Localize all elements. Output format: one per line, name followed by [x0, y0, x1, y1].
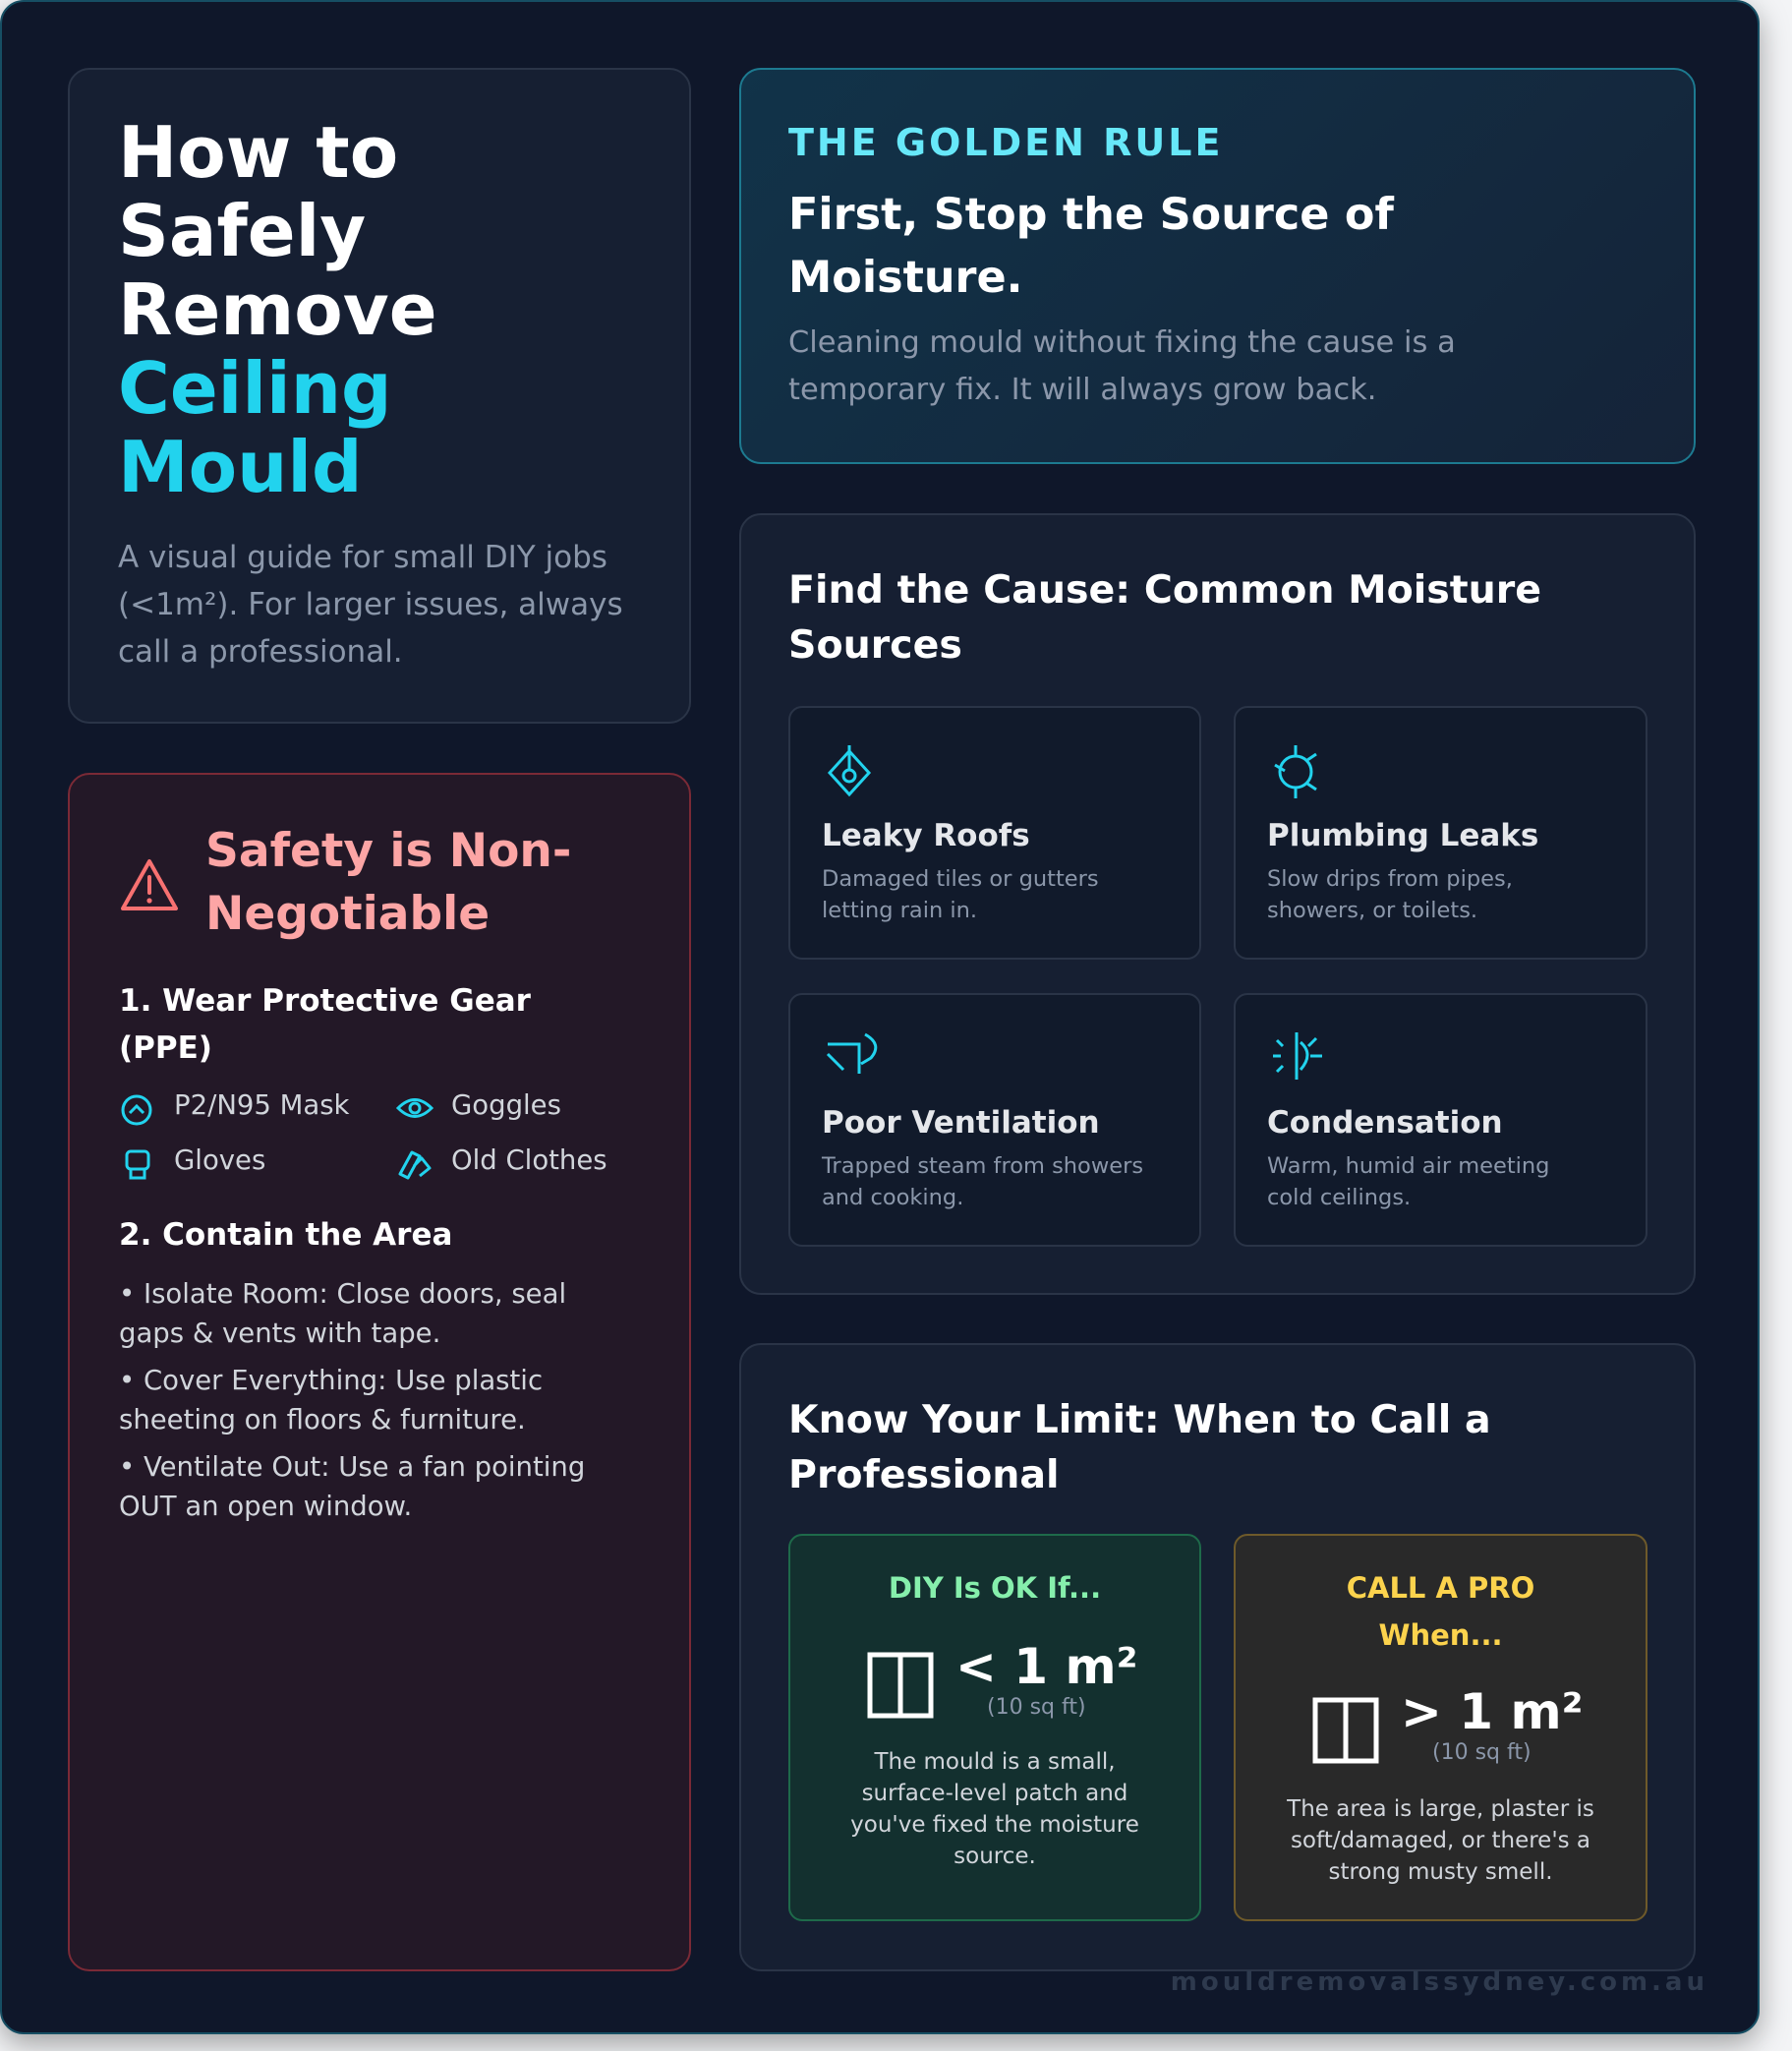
box: call a pro: The area is large, plaster is [1287, 1796, 1594, 1822]
step 2 bullets: • Isolate Room: Close doors, seal [119, 1278, 566, 1310]
card: plumbing [1234, 706, 1647, 960]
heading: Professional [788, 1452, 1060, 1497]
title: Ceiling [118, 347, 392, 430]
step 2 bullets: • Cover Everything: Use plastic [119, 1365, 543, 1396]
box: call a pro: soft/damaged, or there's a [1291, 1828, 1590, 1853]
heading: Find the Cause: Common Moisture [788, 567, 1541, 613]
heading: safety: Safety is Non- [205, 824, 571, 878]
subtitle: (<1m²). For larger issues, always [118, 587, 623, 622]
subtitle: call a professional. [118, 634, 403, 670]
step 1 heading: 1. Wear Protective Gear [119, 983, 531, 1019]
title [118, 111, 437, 508]
card: plumbing: showers, or toilets. [1267, 898, 1477, 923]
heading: safety: Negotiable [205, 887, 490, 941]
icon: ventilation [827, 1032, 877, 1074]
subtitle: A visual guide for small DIY jobs [118, 540, 607, 575]
box: call a pro: CALL A PRO [1347, 1571, 1534, 1605]
box: DIY ok [788, 1534, 1201, 1921]
card: condensation: cold ceilings. [1267, 1185, 1411, 1210]
step 2 heading: 2. Contain the Area [119, 1217, 452, 1253]
icon: mask [122, 1095, 151, 1125]
box: DIY ok: < 1 m² [955, 1638, 1138, 1695]
step 1 heading: (PPE) [119, 1030, 212, 1066]
step 2 bullets: • Ventilate Out: Use a fan pointing [119, 1451, 585, 1483]
icon: roof leak [828, 745, 871, 796]
footer url: mouldremovalssydney.com.au [1171, 1967, 1708, 1997]
step 2 bullets: sheeting on floors & furniture. [119, 1404, 526, 1436]
card: leaky roofs [788, 706, 1201, 960]
icon: plumbing [1274, 745, 1317, 798]
heading [788, 567, 1541, 668]
box: DIY ok: DIY Is OK If... [889, 1571, 1101, 1605]
heading: Sources [788, 622, 962, 668]
heading: Know Your Limit: When to Call a [788, 1397, 1491, 1442]
label: THE GOLDEN RULE [788, 121, 1223, 164]
card: plumbing: Plumbing Leaks [1267, 818, 1538, 853]
box: call a pro: > 1 m² [1401, 1683, 1583, 1740]
box: DIY ok: surface-level patch and [862, 1781, 1127, 1806]
panel: causes [739, 513, 1696, 1295]
body [788, 325, 1456, 407]
step 2 bullets [119, 1278, 585, 1522]
subtitle [118, 540, 623, 670]
card: condensation: Condensation [1267, 1105, 1503, 1141]
title: Remove [118, 268, 437, 351]
PPE list [122, 1089, 607, 1180]
step 2 bullets: gaps & vents with tape. [119, 1318, 440, 1349]
icon: goggles [396, 1098, 434, 1118]
box: DIY ok: (10 sq ft) [987, 1695, 1086, 1720]
heading [788, 1397, 1491, 1497]
heading: safety [205, 824, 571, 941]
card: ventilation [788, 993, 1201, 1247]
heading: First, Stop the Source of [788, 190, 1394, 240]
card: leaky roofs: letting rain in. [822, 898, 977, 923]
card: ventilation: and cooking. [822, 1185, 963, 1210]
panel: know your limit [739, 1343, 1696, 1971]
box: DIY ok: source. [954, 1844, 1036, 1869]
heading [788, 190, 1394, 303]
PPE list: P2/N95 Mask [174, 1089, 349, 1121]
card: ventilation: Trapped steam from showers [822, 1153, 1143, 1179]
panel: safety [68, 773, 691, 1971]
box: DIY ok: The mould is a small, [874, 1749, 1116, 1775]
PPE list: Goggles [451, 1089, 561, 1121]
step 2 bullets: OUT an open window. [119, 1491, 412, 1522]
card: plumbing: Slow drips from pipes, [1267, 866, 1513, 892]
title: Safely [118, 190, 366, 272]
title: Mould [118, 426, 363, 508]
icon: area square [1313, 1697, 1378, 1764]
card: leaky roofs: Damaged tiles or gutters [822, 866, 1099, 892]
PPE list: Gloves [174, 1144, 265, 1176]
card: condensation [1234, 993, 1647, 1247]
box: call a pro: strong musty smell. [1328, 1859, 1553, 1885]
box: call a pro [1234, 1534, 1647, 1921]
icon: gloves [126, 1150, 149, 1180]
box: call a pro: (10 sq ft) [1432, 1740, 1532, 1765]
box: DIY ok: you've fixed the moisture [850, 1812, 1139, 1838]
icon: warning [121, 859, 179, 910]
card: leaky roofs: Leaky Roofs [822, 818, 1030, 853]
PPE list: Old Clothes [451, 1144, 607, 1176]
step 1 heading [119, 983, 531, 1066]
panel: title [68, 68, 691, 724]
icon: clothes [398, 1150, 432, 1180]
icon: area square [867, 1652, 934, 1719]
card: ventilation: Poor Ventilation [822, 1105, 1100, 1141]
body: Cleaning mould without fixing the cause is a [788, 325, 1456, 360]
icon: condensation [1273, 1032, 1322, 1080]
card: condensation: Warm, humid air meeting [1267, 1153, 1549, 1179]
body: temporary fix. It will always grow back. [788, 373, 1376, 407]
title: How to [118, 111, 398, 194]
panel: golden rule [739, 68, 1696, 464]
box: call a pro: When... [1378, 1618, 1502, 1652]
heading: Moisture. [788, 253, 1023, 303]
